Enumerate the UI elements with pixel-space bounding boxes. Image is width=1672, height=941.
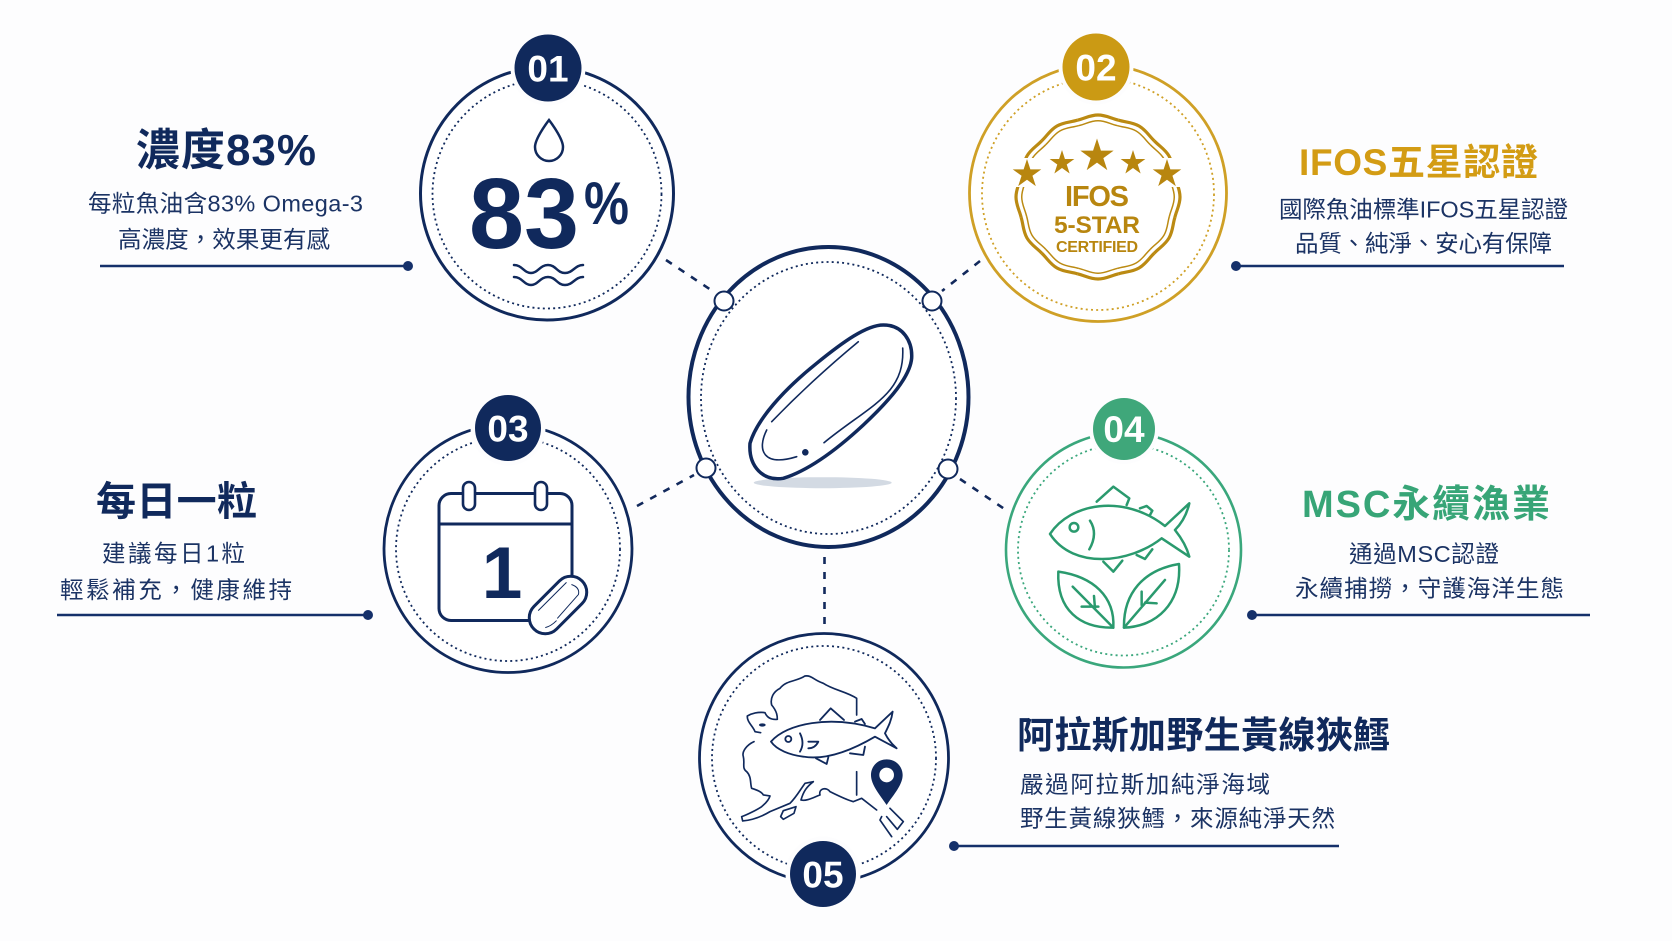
- description 01: 每粒魚油含83% Omega-3: [88, 190, 363, 216]
- big number 83%: %: [584, 170, 629, 237]
- description 05: 野生黃線狹鱈，來源純淨天然: [1020, 806, 1335, 832]
- description 04: 永續捕撈，守護海洋生態: [1295, 576, 1564, 602]
- heading 02: IFOS五星認證: [1299, 142, 1538, 183]
- capsule shadow: [754, 477, 892, 488]
- description 03: 建議每日1粒: [102, 540, 245, 566]
- description 02: 國際魚油標準IFOS五星認證: [1279, 196, 1568, 222]
- panel 03: daily text: [57, 480, 373, 620]
- panel 04: MSC text: [1247, 484, 1590, 620]
- seal text: 5-STAR: [1054, 212, 1140, 239]
- circle 05: [700, 634, 948, 912]
- fish: [771, 708, 897, 764]
- description 02: [1279, 196, 1568, 256]
- description 01: 高濃度，效果更有感: [118, 226, 330, 252]
- heading 05: 阿拉斯加野生黃線狹鱈: [1017, 715, 1390, 756]
- panel 05: Alaska text: [949, 715, 1390, 851]
- description 01: [88, 190, 363, 252]
- icon: calendar: 1: [482, 533, 522, 614]
- circle 03: [384, 390, 632, 672]
- heading 04: MSC永續漁業: [1302, 484, 1550, 526]
- leader line 03: [57, 610, 373, 620]
- heading 01: 濃度83%: [136, 126, 316, 175]
- seal text: CERTIFIED: [1056, 239, 1138, 256]
- icon: oil drop: [535, 120, 563, 161]
- circle 01: [420, 30, 674, 320]
- description 04: 通過MSC認證: [1349, 541, 1499, 567]
- badge 03: [470, 390, 546, 466]
- leader line 02: [1231, 261, 1564, 271]
- big number 83%: [469, 158, 629, 270]
- central capsule circle: [688, 247, 968, 547]
- badge 03: 03: [487, 408, 529, 450]
- icon: waves: [514, 265, 583, 285]
- icon: Alaska map with fish and pin: [742, 676, 903, 837]
- badge 01: 01: [527, 48, 569, 90]
- circle 04: [1006, 394, 1241, 668]
- panel 01: concentration text: [88, 126, 413, 271]
- icon: fish and leaves: [1050, 487, 1189, 628]
- big number 83%: 83: [469, 158, 579, 270]
- description 02: 品質、純淨、安心有保障: [1295, 230, 1552, 256]
- stars: [1013, 138, 1181, 186]
- badge 04: 04: [1103, 409, 1145, 450]
- description 05: 嚴過阿拉斯加純淨海域: [1020, 772, 1270, 798]
- icon: small capsule: [523, 570, 593, 640]
- badge 02: 02: [1075, 48, 1117, 88]
- seal text: [1054, 181, 1140, 256]
- badge 01: [510, 30, 586, 106]
- icon: IFOS seal: [1008, 115, 1188, 279]
- leader line 04: [1247, 610, 1590, 620]
- seal text: IFOS: [1065, 181, 1129, 213]
- badge 05: 05: [802, 854, 844, 896]
- description 05: [1020, 772, 1335, 832]
- badge 04: [1089, 394, 1159, 464]
- connector nodes: [696, 292, 958, 478]
- description 03: 輕鬆補充，健康維持: [60, 577, 292, 603]
- map outline: [742, 676, 903, 837]
- badge 02: [1058, 30, 1134, 104]
- leader line 01: [100, 261, 413, 271]
- dashed connectors: [637, 260, 1006, 628]
- description 03: [60, 540, 292, 603]
- description 04: [1295, 541, 1564, 602]
- icon: capsule: [750, 325, 912, 479]
- leader line 05: [949, 841, 1339, 851]
- pin: [871, 759, 903, 805]
- panel 02: IFOS text: [1231, 142, 1568, 271]
- badge 05: [786, 836, 860, 912]
- icon: calendar: [439, 482, 593, 640]
- heading 03: 每日一粒: [96, 480, 257, 524]
- circle 02: [970, 30, 1226, 322]
